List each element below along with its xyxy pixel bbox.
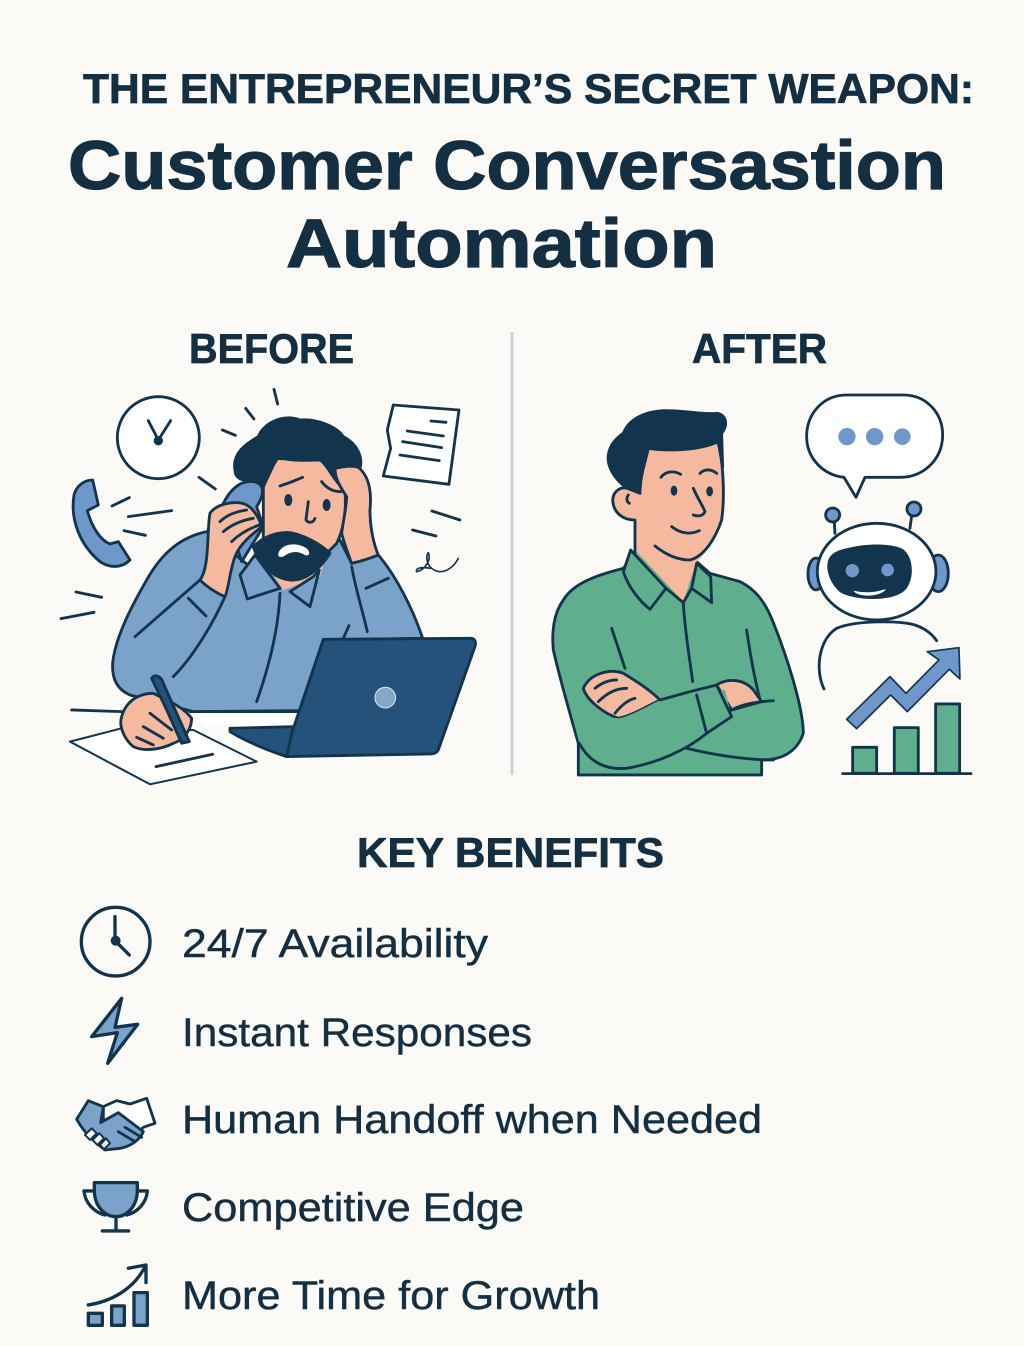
green shirt [553, 550, 803, 775]
face outline [613, 443, 723, 560]
hand holding phone [200, 503, 261, 597]
shirt folds [612, 603, 760, 700]
right hand [717, 680, 762, 710]
benefit: availability: 24/7 Availability [182, 922, 488, 966]
handset at ear [223, 481, 263, 562]
blue shirt [113, 532, 423, 712]
neck [263, 553, 327, 590]
benefit: edge: Competitive Edge [182, 1186, 524, 1230]
icon: lightning bolt [92, 998, 138, 1063]
stressed man [113, 418, 423, 712]
left hand [583, 671, 660, 718]
visor [827, 544, 912, 599]
benefit: responses: Instant Responses [182, 1011, 532, 1055]
calm man [553, 411, 803, 775]
neck and face fill [613, 443, 723, 602]
hand on head [335, 466, 378, 563]
head [817, 523, 936, 620]
benefits list [182, 922, 762, 1318]
title [68, 65, 974, 282]
eyebrow heading: THE ENTREPRENEUR’S SECRET WEAPON: [83, 65, 974, 112]
icon: trophy [84, 1183, 147, 1231]
laptop [230, 638, 476, 757]
icon: crumpled note [383, 405, 459, 484]
facial features [627, 470, 717, 533]
before heading: BEFORE [189, 325, 354, 372]
icon: wall clock [117, 397, 199, 479]
stress lines [61, 389, 460, 619]
squiggle [416, 553, 458, 572]
main heading line 2: Automation [286, 205, 717, 282]
hair [235, 418, 361, 487]
after heading: AFTER [692, 325, 827, 372]
key benefits heading: KEY BENEFITS [357, 829, 664, 876]
robot body outline [819, 622, 937, 689]
benefit: handoff: Human Handoff when Needed [182, 1098, 762, 1142]
smile [853, 589, 886, 596]
collar [623, 550, 712, 609]
collar [240, 555, 319, 607]
crossed forearm [572, 690, 732, 769]
ear pads [808, 558, 824, 590]
baseline [843, 769, 971, 778]
arrow [847, 648, 960, 729]
growth chart [843, 648, 971, 774]
icon: growth bars [88, 1265, 147, 1325]
icon: notepaper [70, 728, 257, 784]
robot assistant [808, 502, 948, 689]
icon: clock [81, 907, 150, 976]
panel: after illustration [553, 395, 971, 775]
speech bubble [807, 395, 943, 497]
brows, eyes and nose [280, 477, 341, 522]
benefit icons [77, 907, 155, 1325]
icon: handshake [77, 1098, 155, 1150]
antennae [834, 516, 912, 533]
writing hand and pen [121, 676, 192, 750]
desk edge [72, 710, 300, 712]
icon: ringing phone [73, 480, 130, 566]
bars [853, 747, 877, 773]
sleeve outlines [579, 685, 773, 769]
beard and mouth [253, 533, 330, 580]
benefit: growth: More Time for Growth [182, 1274, 600, 1318]
face [263, 458, 345, 567]
main heading line 1: Customer Conversastion [68, 127, 946, 204]
hair [608, 411, 726, 493]
shirt folds [135, 567, 388, 702]
panel: before illustration [61, 389, 476, 784]
